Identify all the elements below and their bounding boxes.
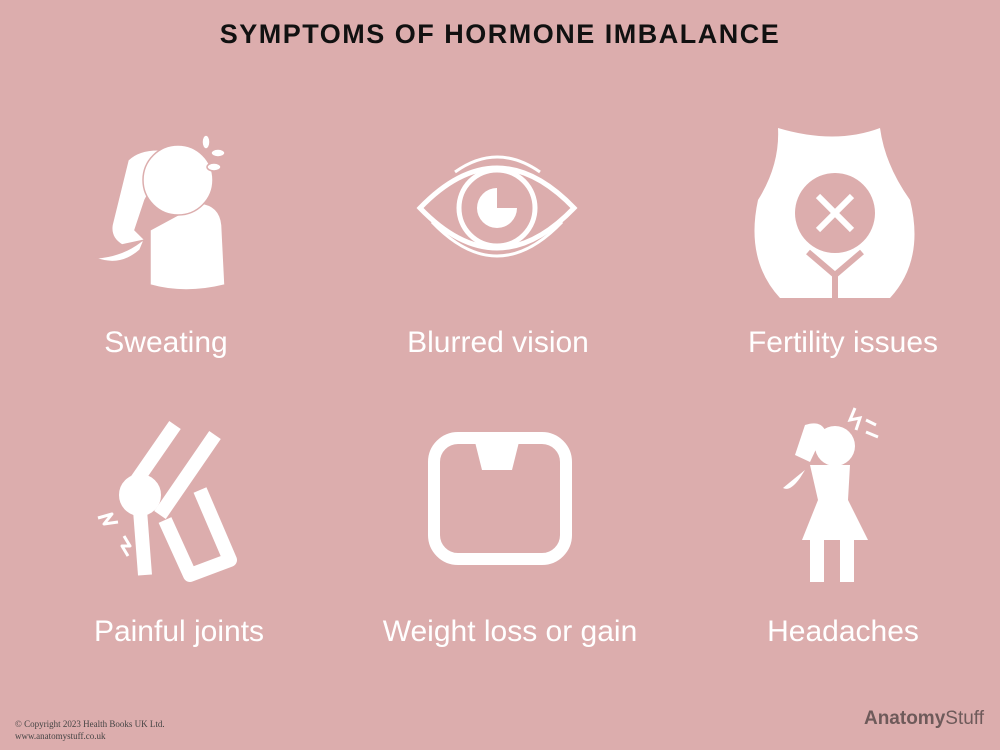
label: painful joints: Painful joints [94, 615, 264, 648]
icon: eye [420, 157, 574, 256]
icon: sweating [95, 135, 225, 290]
icon: headache [783, 408, 878, 582]
label: headaches: Headaches [767, 615, 919, 648]
logo: AnatomyStuff [864, 708, 984, 729]
label: blurred vision: Blurred vision [407, 326, 589, 359]
copyright: www.anatomystuff.co.uk [15, 731, 105, 741]
label: sweating: Sweating [104, 326, 228, 359]
label: fertility: Fertility issues [748, 326, 938, 359]
copyright: © Copyright 2023 Health Books UK Ltd. [15, 719, 165, 729]
title: SYMPTOMS OF HORMONE IMBALANCE [220, 19, 780, 49]
icon: scale [434, 438, 566, 559]
icon: knee [98, 425, 230, 575]
icon: fertility [754, 128, 914, 298]
copyright [15, 719, 165, 741]
label: weight: Weight loss or gain [383, 615, 637, 648]
